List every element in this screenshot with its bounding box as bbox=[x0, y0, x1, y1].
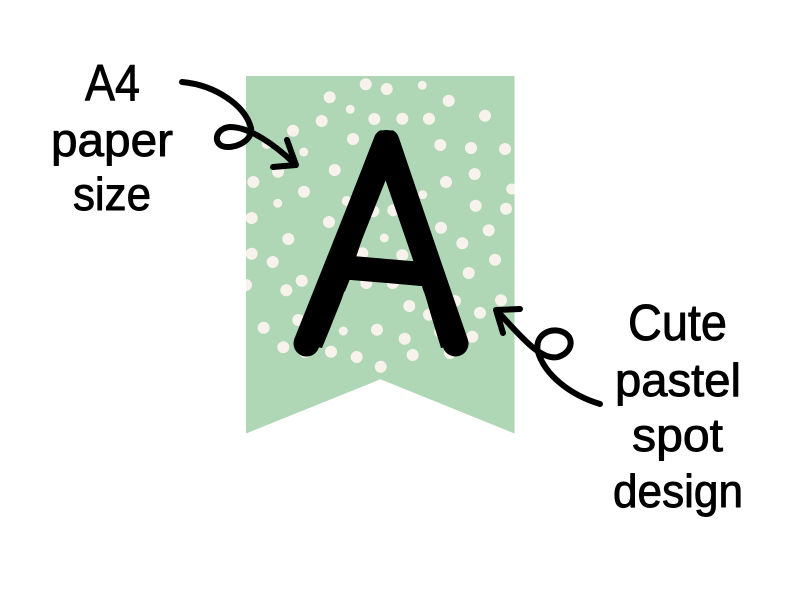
large letter A: A bbox=[294, 63, 478, 425]
heading: A4 paper size: A4 bbox=[85, 54, 140, 112]
heading: Cute pastel spot design bbox=[613, 294, 743, 517]
pastel spot pattern bbox=[240, 78, 517, 373]
large letter A bbox=[294, 130, 468, 356]
banner background bbox=[246, 76, 514, 434]
heading: Cute pastel spot design: pastel bbox=[615, 354, 741, 406]
heading: Cute pastel spot design: design bbox=[613, 465, 743, 517]
arrow: spot label to banner bbox=[496, 309, 600, 404]
heading: Cute pastel spot design: Cute bbox=[628, 294, 727, 351]
heading: A4 paper size: size bbox=[73, 168, 151, 220]
panel: pennant banner bbox=[240, 63, 517, 434]
arrow: A4 label to banner bbox=[182, 82, 296, 167]
heading: A4 paper size bbox=[51, 54, 173, 220]
heading: Cute pastel spot design: spot bbox=[632, 409, 723, 461]
heading: A4 paper size: paper bbox=[51, 114, 173, 166]
